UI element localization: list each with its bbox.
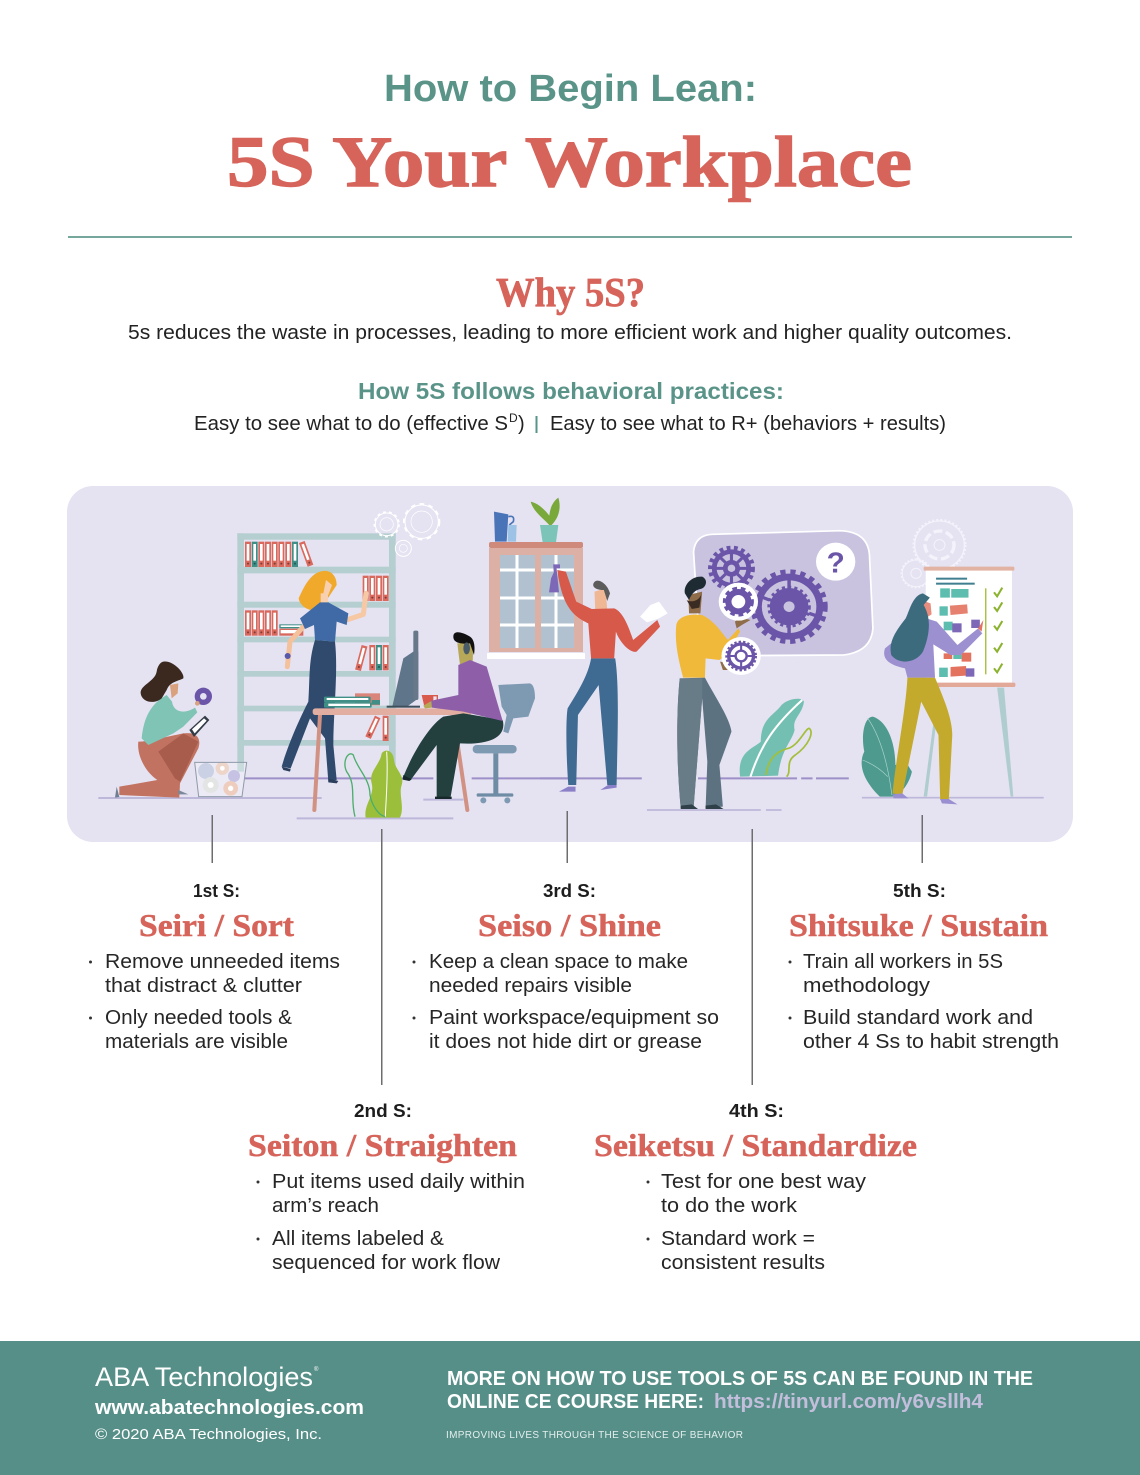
kneeling woman with gear and tablet xyxy=(115,662,212,798)
teal plant center xyxy=(740,699,811,777)
icon: white circle gear top xyxy=(719,583,758,621)
panel: office illustration xyxy=(67,486,1073,842)
bullet list: Seiketsu: consistent results xyxy=(661,1252,825,1274)
heading: Shitsuke / Sustain: Shitsuke / Sustain xyxy=(789,907,1048,943)
floor lines left xyxy=(98,778,570,818)
window with shelf xyxy=(487,542,585,659)
panel: 5th S Shitsuke / Sustain xyxy=(788,881,1059,1053)
icon: checkmarks xyxy=(994,588,1002,672)
bullet list: Shitsuke: methodology xyxy=(803,975,930,997)
bullet list: Seiri: that distract & clutter xyxy=(105,975,302,997)
bullet list: Seiri: Only needed tools & xyxy=(105,1007,293,1029)
bullet list: Seiri: materials are visible xyxy=(105,1031,288,1053)
green floor plant xyxy=(345,751,402,818)
heading: Seiri / Sort: Seiri / Sort xyxy=(139,907,294,943)
illustration: left half of office scene xyxy=(98,498,570,818)
footer band xyxy=(0,1341,1140,1475)
bullet list: Seiton xyxy=(256,1171,525,1274)
header divider xyxy=(68,236,1072,238)
bullet list: Seiketsu: Test for one best way xyxy=(661,1171,866,1193)
footer website: www.abatechnologies.com xyxy=(94,1397,364,1419)
text: behavioral practices line xyxy=(194,411,946,435)
panel: 1st S Seiri / Sort xyxy=(89,881,340,1053)
bullet list: Seiton: sequenced for work flow xyxy=(272,1252,501,1274)
panel: 3rd S Seiso / Shine: 3rd S: xyxy=(543,881,596,901)
bullet list: Seiton: arm’s reach xyxy=(272,1195,379,1217)
heading: Seiketsu / Standardize: Seiketsu / Standardize xyxy=(594,1127,917,1163)
woman at board xyxy=(884,593,983,804)
icon: question mark: ? xyxy=(827,548,845,579)
bullet list: Seiri: Remove unneeded items xyxy=(105,951,340,973)
panel: 5th S Shitsuke / Sustain: 5th S: xyxy=(893,881,946,901)
icon: question mark xyxy=(816,543,855,581)
white outline gears right xyxy=(901,520,966,588)
panel: 1st S Seiri / Sort: 1st S: xyxy=(193,881,240,901)
bullet list: Seiso: it does not hide dirt or grease xyxy=(429,1031,702,1053)
text: behavioral practices line: Easy to see what to R+ (behaviors + results) xyxy=(550,413,946,435)
bullet list: Seiso: Paint workspace/equipment so xyxy=(429,1007,719,1029)
bullet list: Seiketsu: Standard work = xyxy=(661,1228,815,1250)
footer tagline: IMPROVING LIVES THROUGH THE SCIENCE OF BEHAVIOR xyxy=(446,1430,743,1441)
text: behavioral practices line: Easy to see what to do (effective S xyxy=(194,413,508,435)
heading: How 5S follows behavioral practices: How 5S follows behavioral practices: xyxy=(358,378,784,404)
footer call to action xyxy=(447,1368,1033,1413)
text: behavioral practices line: D xyxy=(509,411,518,425)
subtitle: How to Begin Lean: How to Begin Lean: xyxy=(384,68,757,110)
bullet list: Seiton: Put items used daily within xyxy=(272,1171,525,1193)
bullet list: Seiketsu: to do the work xyxy=(661,1195,798,1217)
bullet list: Shitsuke xyxy=(788,951,1059,1053)
man at computer xyxy=(403,632,503,799)
heading: Why 5S?: Why 5S? xyxy=(496,269,645,315)
icon: white circle gear bottom xyxy=(721,637,761,675)
basket of gears xyxy=(195,762,247,797)
bullet list: Seiketsu xyxy=(646,1171,866,1274)
bullet list: Shitsuke: other 4 Ss to habit strength xyxy=(803,1031,1059,1053)
panel: 4th S Seiketsu / Standardize xyxy=(594,1101,917,1274)
panel: 2nd S Seiton / Straighten xyxy=(248,1101,525,1274)
dark teal plant right xyxy=(862,717,912,797)
text: why 5S explanation: 5s reduces the waste in processes, leading to more efficient work and higher quality outcomes. xyxy=(128,322,1012,344)
bullet list: Seiso xyxy=(412,951,719,1053)
panel: 4th S Seiketsu / Standardize: 4th S: xyxy=(729,1101,784,1121)
illustration: right half of office scene xyxy=(540,520,1044,810)
footer call to action: MORE ON HOW TO USE TOOLS OF 5S CAN BE FOUND IN THE xyxy=(447,1368,1033,1390)
bullet list: Shitsuke: Build standard work and xyxy=(803,1007,1033,1029)
connector lines xyxy=(212,811,923,1085)
icon: small purple gear xyxy=(710,548,753,589)
desk with books and monitor xyxy=(313,631,472,810)
easel board with sticky notes xyxy=(924,567,1015,797)
bullet list: Seiso: Keep a clean space to make xyxy=(429,951,688,973)
footer copyright: © 2020 ABA Technologies, Inc. xyxy=(95,1426,322,1443)
panel: 3rd S Seiso / Shine xyxy=(412,881,719,1053)
bullet list: Seiso: needed repairs visible xyxy=(429,975,632,997)
thought bubble with gears xyxy=(694,531,873,656)
shelf unit xyxy=(237,533,396,772)
man cleaning window xyxy=(549,564,668,792)
jugs and potted plant xyxy=(494,498,560,542)
text: behavioral practices line: ) xyxy=(518,413,525,435)
icon: large purple gear xyxy=(753,572,825,641)
binders xyxy=(245,541,389,741)
chair xyxy=(473,683,535,803)
title: 5S Your Workplace: 5S Your Workplace xyxy=(227,122,912,202)
footer call to action: ONLINE CE COURSE HERE: xyxy=(447,1391,704,1413)
footer logo: ABA Technologies: ® xyxy=(314,1366,319,1373)
panel: 2nd S Seiton / Straighten: 2nd S: xyxy=(354,1101,412,1121)
heading: Seiso / Shine: Seiso / Shine xyxy=(478,907,661,943)
footer call to action: https://tinyurl.com/y6vsllh4 xyxy=(714,1391,984,1413)
bullet list: Shitsuke: Train all workers in 5S xyxy=(803,951,1003,973)
heading: Seiton / Straighten: Seiton / Straighten xyxy=(248,1127,517,1163)
man holding gears xyxy=(676,577,761,809)
bullet list: Seiri xyxy=(89,951,340,1053)
floor lines right xyxy=(540,778,1044,810)
woman at shelf xyxy=(282,571,366,783)
white outline gears top xyxy=(374,504,439,556)
bullet list: Seiton: All items labeled & xyxy=(272,1228,445,1250)
footer logo: ABA Technologies: ABA Technologies xyxy=(95,1362,313,1392)
